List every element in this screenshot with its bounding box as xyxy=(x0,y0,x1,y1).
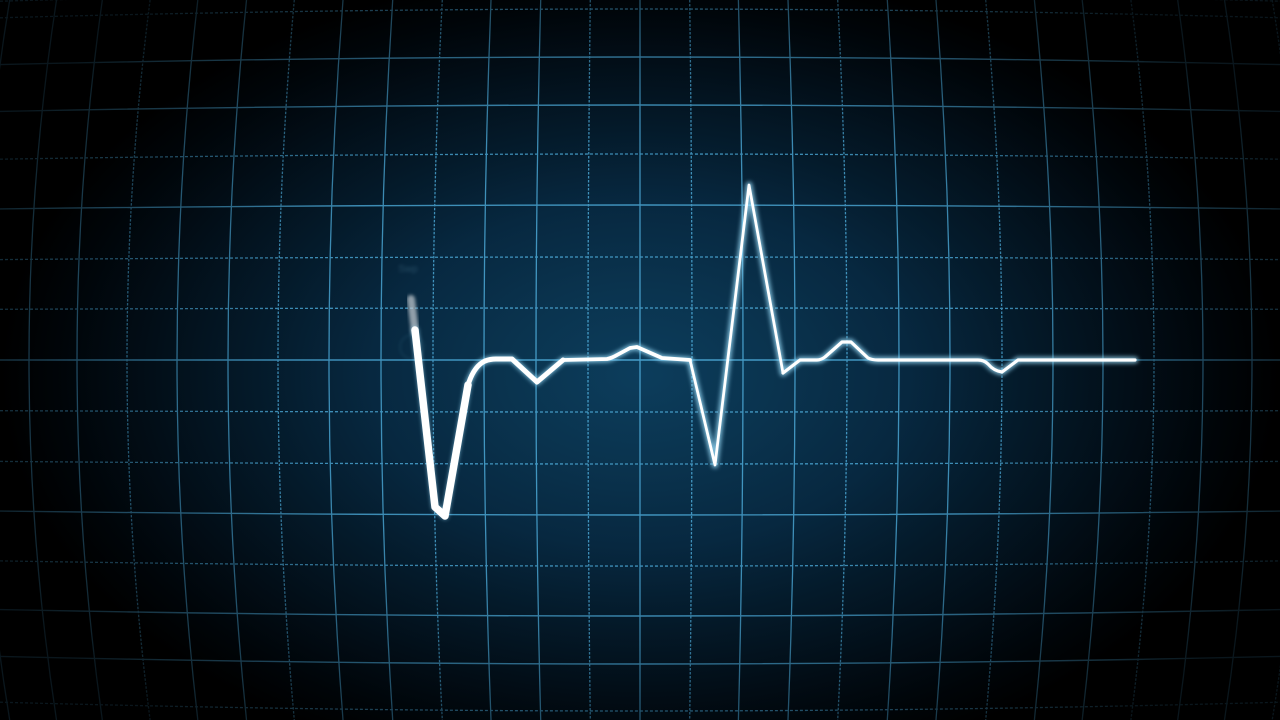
faint ghost marks above the trace xyxy=(398,264,424,359)
second small wave xyxy=(563,347,690,360)
ghost circle xyxy=(400,335,424,359)
recovery and first small wave xyxy=(468,359,563,385)
trace glow xyxy=(415,185,1135,516)
main spike xyxy=(690,185,783,465)
fading tail of the trace xyxy=(411,299,415,331)
ECG trace xyxy=(415,185,1135,516)
post-spike wave and flat tail xyxy=(783,342,1135,373)
deep first dip, thickest xyxy=(415,330,468,516)
ghost label: Swp xyxy=(398,264,418,275)
